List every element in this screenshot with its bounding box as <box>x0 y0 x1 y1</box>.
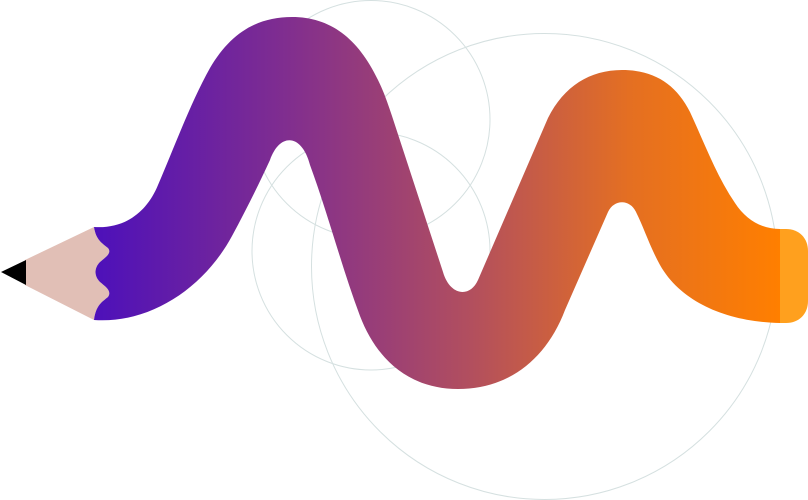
pencil body wave <box>94 17 780 389</box>
pencil tip: wood <box>25 227 109 320</box>
eraser <box>780 229 808 323</box>
pencil tip: graphite <box>1 260 26 285</box>
construction circles <box>252 0 778 500</box>
